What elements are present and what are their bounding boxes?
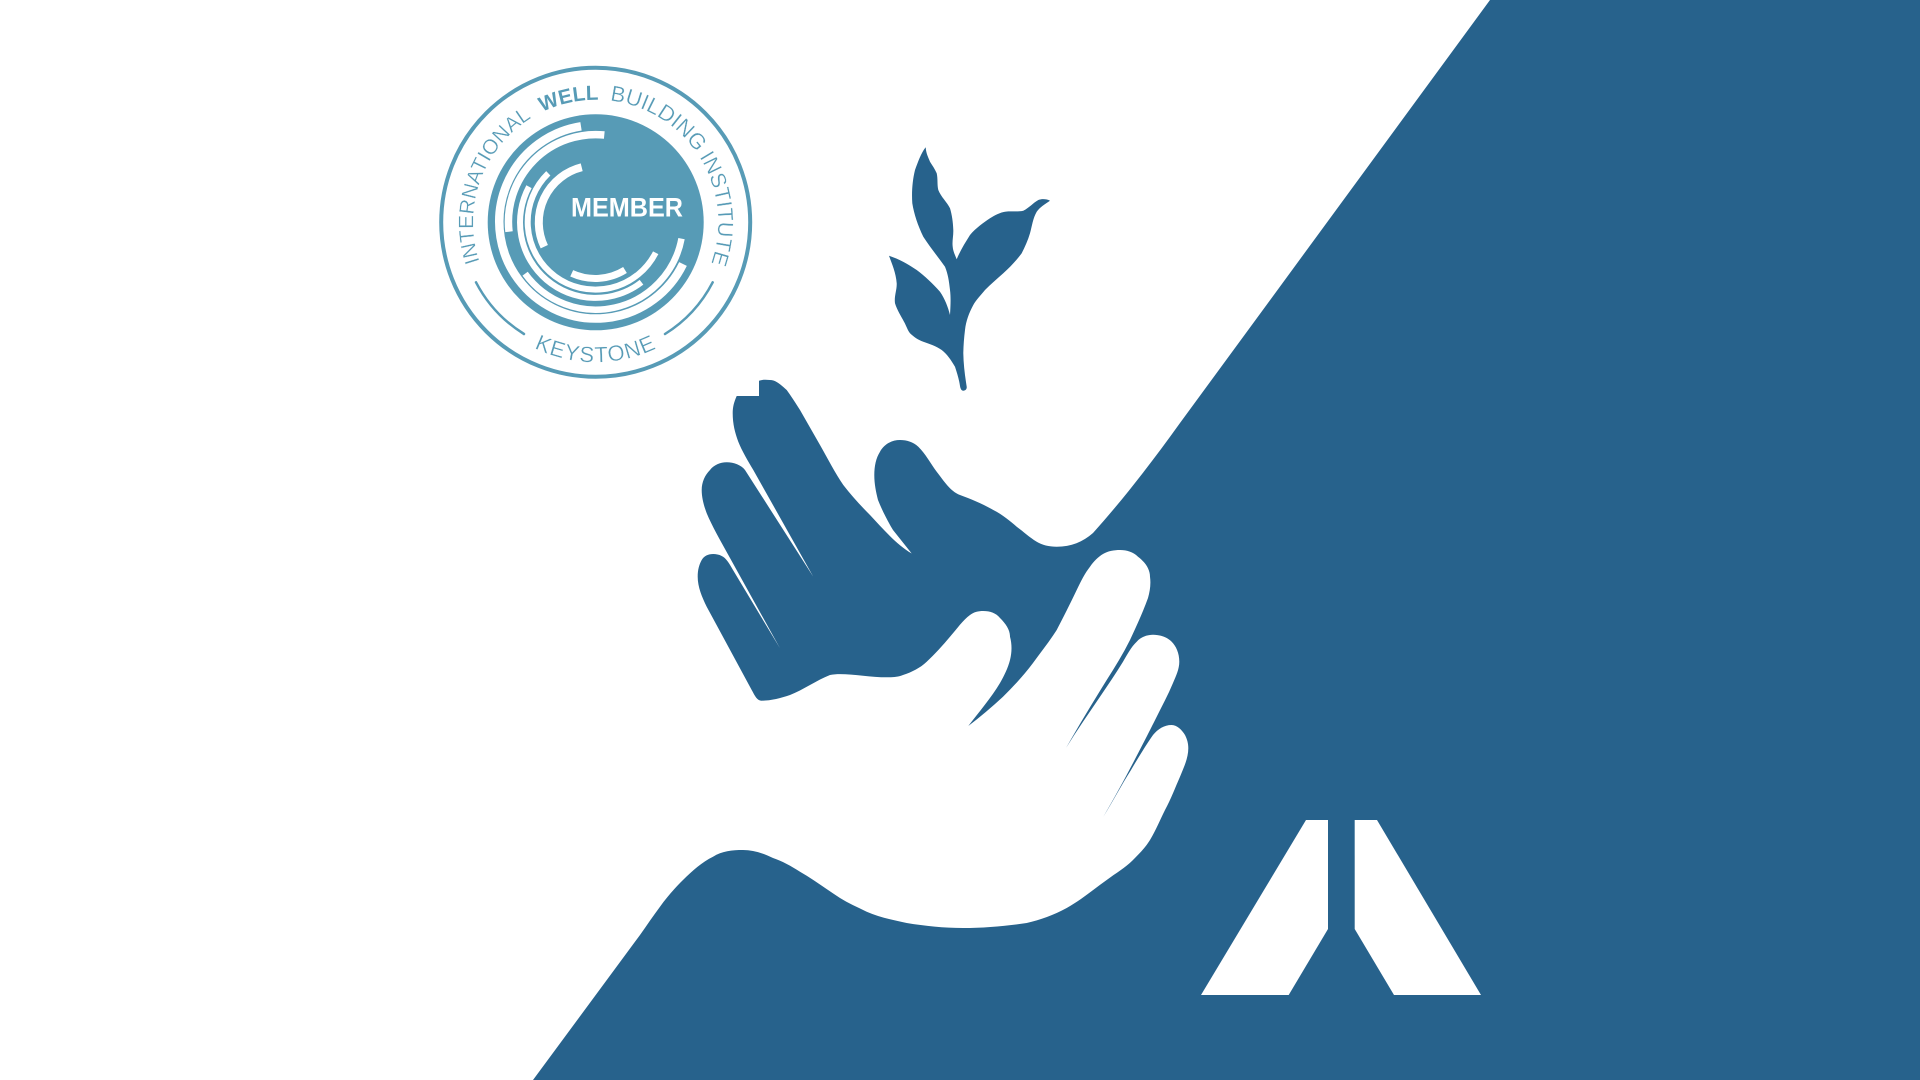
badge inner disc — [488, 114, 704, 330]
icon: plant sprout — [889, 147, 1050, 391]
badge outer ring — [441, 68, 750, 377]
badge curved text: organisation name: INTERNATIONAL WELL BUILDING INSTITUTE — [458, 86, 734, 266]
logo: white split A mark — [1201, 820, 1481, 995]
badge label: MEMBER: MEMBER — [571, 193, 683, 223]
badge curved text: KEYSTONE: KEYSTONE — [536, 334, 656, 362]
badge side arcs — [476, 282, 713, 334]
badge: International WELL Building Institute member seal — [439, 66, 752, 379]
badge concentric arcs — [499, 126, 683, 319]
panel: blue diagonal background with intertwined hands — [533, 0, 1920, 1080]
